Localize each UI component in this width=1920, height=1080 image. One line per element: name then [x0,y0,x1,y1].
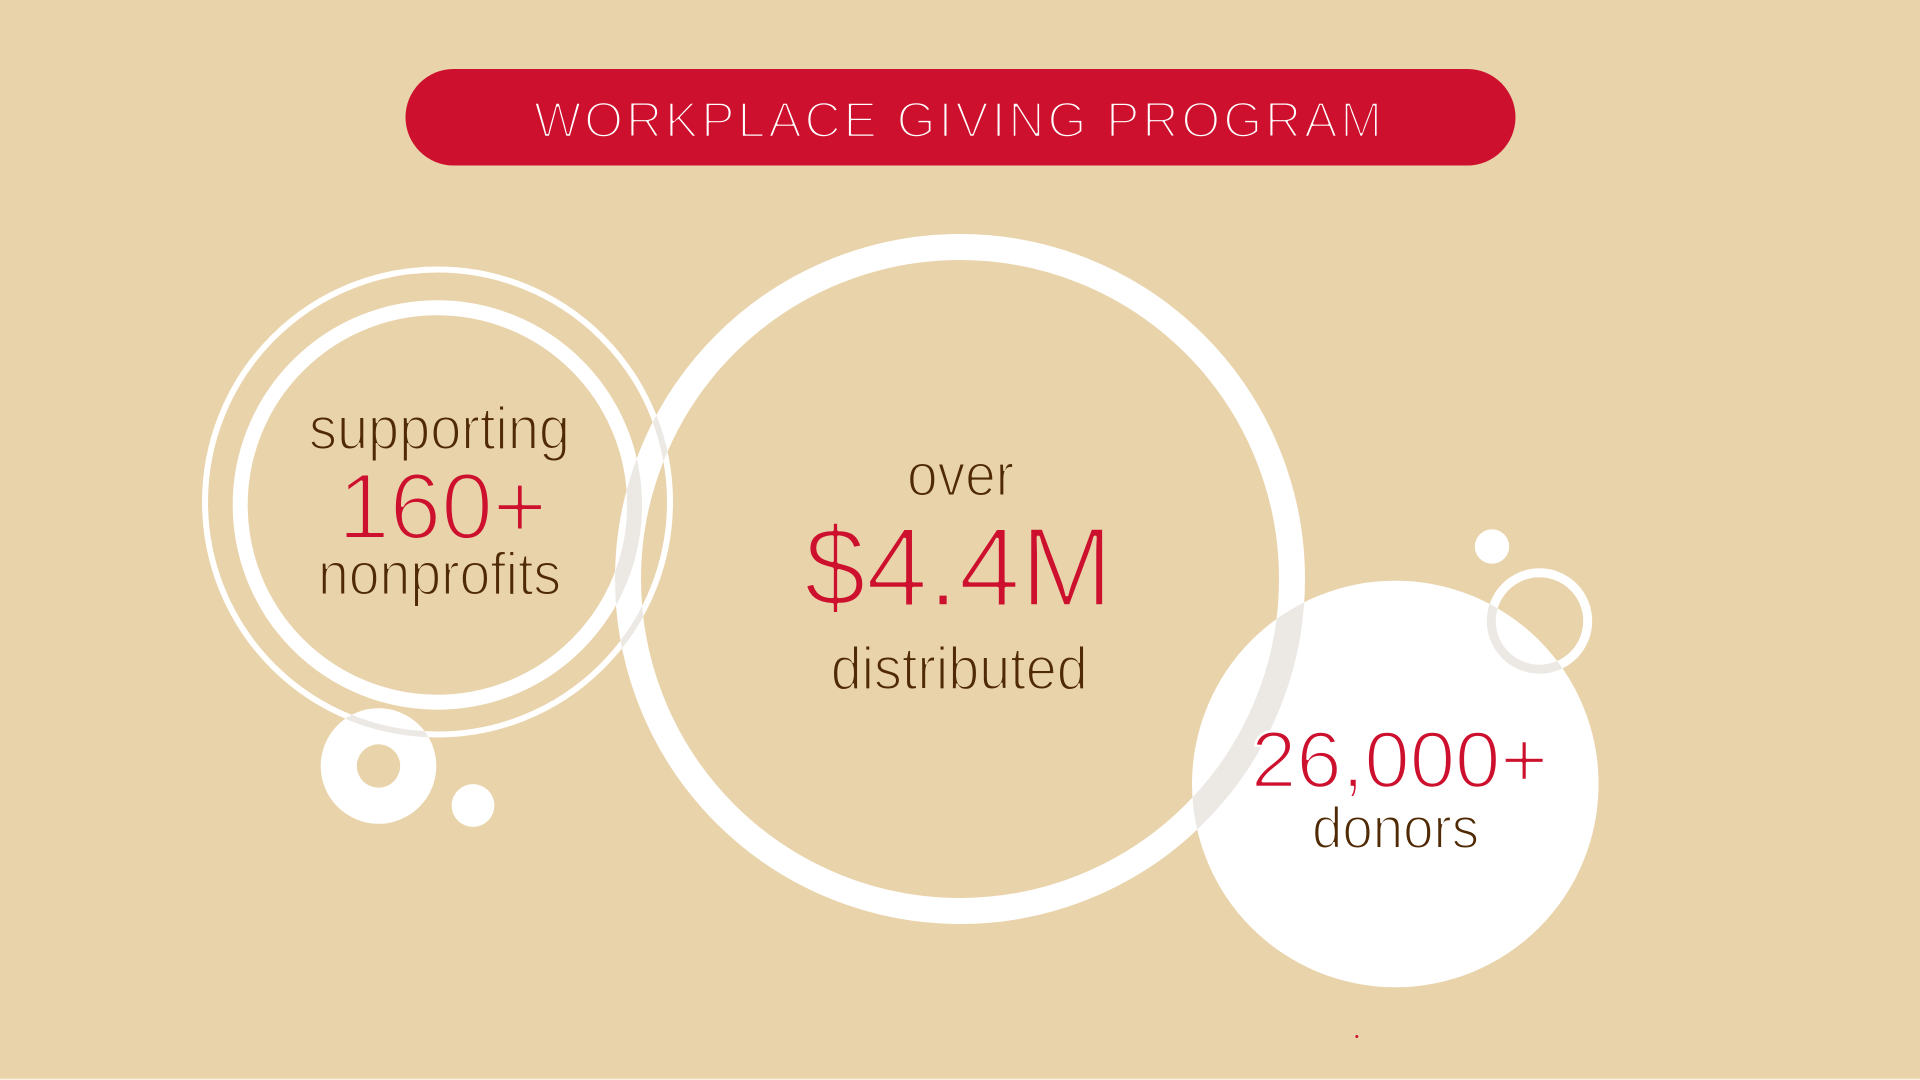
decorative circle: right filled [1192,581,1599,987]
decorative ring: left outer [205,270,670,734]
decorative ring: left inner [240,308,635,702]
stat: 160+ nonprofits: supporting [309,395,570,462]
decorative ring: upper right [1491,573,1588,669]
stat: over $4.4M distributed: $4.4M [804,504,1113,630]
decorative ring: centre large [628,247,1292,911]
title: WORKPLACE GIVING PROGRAM [534,92,1382,148]
stat: 26,000+ donors: donors [1312,796,1479,861]
title banner [406,69,1516,166]
decorative donut: lower left [321,708,436,824]
overlaps between shapes [346,416,1562,830]
stat: over $4.4M distributed: over [907,442,1014,508]
decorative dot: lower left [452,784,494,827]
stat: 160+ nonprofits: 160+ [338,454,547,558]
stat: 26,000+ donors [1251,715,1548,861]
decorative dot: upper right [1475,529,1509,564]
stat: over $4.4M distributed [804,442,1113,702]
stat: 160+ nonprofits [309,395,570,608]
small red dot [1355,1035,1358,1038]
stat: 160+ nonprofits: nonprofits [318,541,561,608]
stat: 26,000+ donors: 26,000+ [1251,715,1548,804]
stat: over $4.4M distributed: distributed [831,635,1088,702]
